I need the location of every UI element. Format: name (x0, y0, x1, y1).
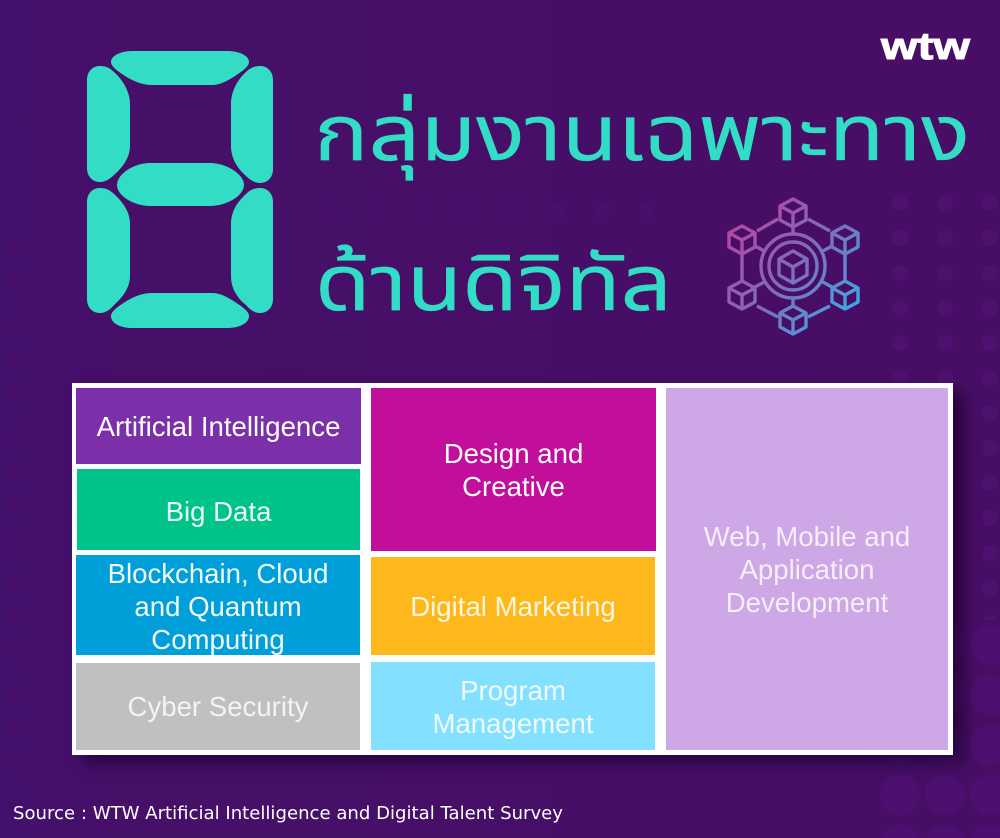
title line 1: กลุ่มงานเฉพาะทาง (314, 80, 970, 196)
tile: Big Data (77, 469, 360, 550)
tile: Cyber Security: Cyber Security (128, 691, 308, 722)
panel: treemap of digital job groups (72, 383, 953, 755)
tile: Digital Marketing (371, 557, 655, 655)
tile: Program Management: Management (432, 708, 594, 739)
tile: Artificial Intelligence (76, 388, 361, 464)
tile: Blockchain, Cloud and Quantum Computing (76, 555, 360, 655)
source note: Source : WTW Artificial Intelligence and Digital Talent Survey (13, 804, 563, 824)
tile: Design and Creative: Creative (462, 470, 565, 502)
tile: Program Management: Program (460, 675, 566, 706)
icon: blockchain network (727, 197, 860, 336)
tile: Cyber Security (76, 663, 360, 750)
tile: Blockchain, Cloud and Quantum Computing: Blockchain, Cloud (108, 558, 328, 588)
title (314, 80, 970, 340)
tile: Design and Creative: Design and (444, 438, 583, 468)
tile: Artificial Intelligence: Artificial Intelligence (97, 410, 340, 442)
tile: Web, Mobile and Application Development: Web, Mobile and (704, 520, 910, 552)
tile: Big Data: Big Data (166, 496, 271, 527)
icon: seven-segment digit 8 (87, 51, 273, 328)
tile: Program Management (371, 662, 655, 750)
tile: Blockchain, Cloud and Quantum Computing: and Quantum (134, 590, 302, 622)
tile: Web, Mobile and Application Development: Development (726, 586, 888, 618)
tile: Digital Marketing: Digital Marketing (410, 590, 616, 622)
tile: Design and Creative (371, 388, 656, 551)
logo: wtw: wtw (880, 26, 971, 67)
tile: Web, Mobile and Application Development (666, 388, 948, 750)
tile: Blockchain, Cloud and Quantum Computing: Computing (151, 624, 285, 654)
tile: Web, Mobile and Application Development: Application (740, 554, 874, 584)
